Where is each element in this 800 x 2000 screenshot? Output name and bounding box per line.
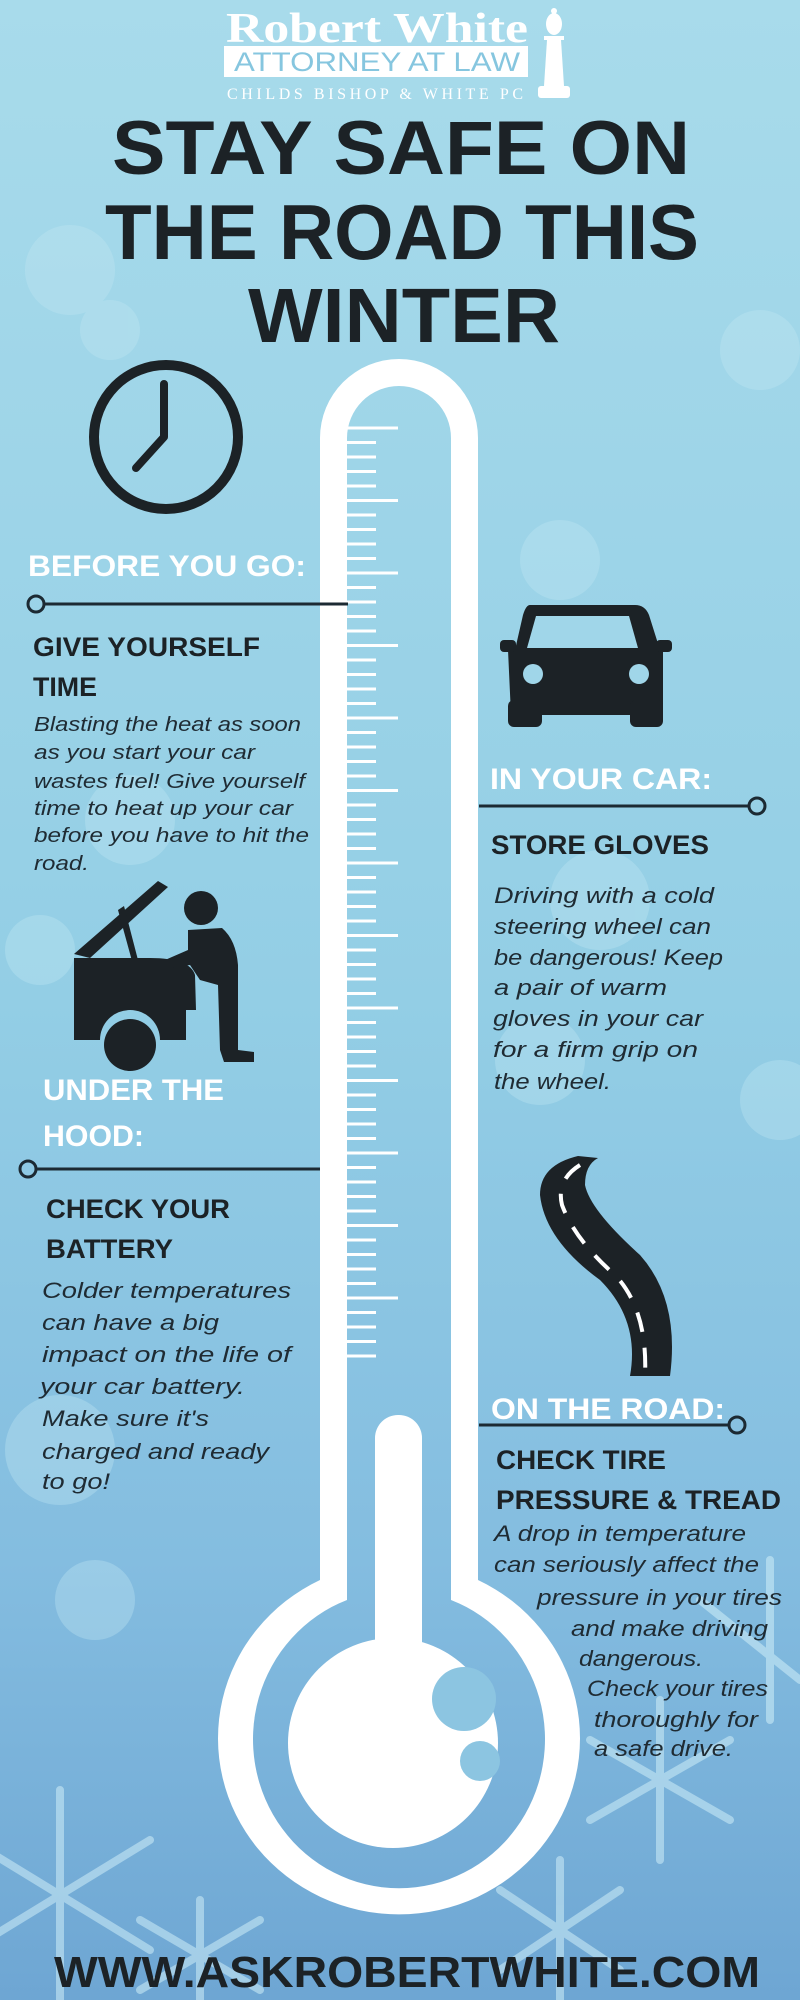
- subheading: store gloves: STORE GLOVES: [491, 830, 709, 860]
- text: check tire pressure: [492, 1521, 782, 1761]
- subheading: give yourself time: GIVE YOURSELF: [33, 632, 260, 662]
- heading: on the road: ON THE ROAD:: [491, 1393, 725, 1426]
- title: WINTER: [248, 273, 560, 359]
- text: check tire pressure: dangerous.: [579, 1646, 703, 1671]
- connector: in your car: [479, 798, 765, 814]
- title: [105, 106, 699, 359]
- text: check tire pressure: thoroughly for: [594, 1707, 760, 1732]
- heading: under the hood: HOOD:: [43, 1120, 144, 1153]
- text: check your battery: your car battery.: [37, 1374, 245, 1399]
- text: store gloves: [493, 883, 723, 1094]
- text: check your battery: to go!: [42, 1469, 110, 1494]
- connector: on the road: [479, 1417, 745, 1433]
- logo: CHILDS BISHOP & WHITE PC: [227, 86, 525, 103]
- heading: in your car: IN YOUR CAR:: [490, 763, 712, 796]
- text: give yourself time: as you start your car: [34, 742, 257, 764]
- subheading: give yourself time: TIME: [33, 672, 97, 702]
- text: check tire pressure: Check your tires: [587, 1676, 768, 1701]
- title: STAY SAFE ON: [112, 106, 690, 191]
- heading: under the hood: UNDER THE: [43, 1074, 224, 1107]
- text: check your battery: can have a big: [42, 1310, 220, 1335]
- text: store gloves: gloves in your car: [493, 1006, 705, 1031]
- text: check tire pressure: pressure in your tires: [536, 1585, 782, 1610]
- text: give yourself time: before you have to hit the: [34, 825, 309, 847]
- logo: Robert White: [226, 6, 528, 52]
- thermometer: [218, 359, 580, 1914]
- heading: before you go: BEFORE YOU GO:: [28, 550, 306, 583]
- text: store gloves: for a firm grip on: [493, 1037, 698, 1062]
- icon: mechanic under the hood: [74, 881, 254, 1071]
- text: give yourself time: [34, 714, 309, 875]
- subheading: check your battery: BATTERY: [46, 1234, 173, 1264]
- text: check your battery: Make sure it's: [42, 1406, 209, 1431]
- text: give yourself time: time to heat up your car: [34, 798, 295, 820]
- heading: under the hood: [43, 1074, 224, 1153]
- text: check tire pressure: can seriously affect the: [494, 1552, 759, 1577]
- text: check your battery: impact on the life of: [42, 1342, 295, 1367]
- subheading: check tire pressure: [496, 1445, 781, 1515]
- subheading: check tire pressure: PRESSURE & TREAD: [496, 1485, 781, 1515]
- text: store gloves: steering wheel can: [494, 914, 711, 939]
- icon: clock: [94, 365, 238, 509]
- footer url: WWW.ASKROBERTWHITE.COM: [54, 1948, 760, 1997]
- connector: under the hood: [20, 1161, 320, 1177]
- text: check tire pressure: a safe drive.: [594, 1736, 733, 1761]
- text: check tire pressure: and make driving: [571, 1616, 769, 1641]
- icon: car: [500, 605, 672, 727]
- text: give yourself time: Blasting the heat as soon: [34, 714, 301, 736]
- text: give yourself time: road.: [34, 853, 89, 875]
- icon: bishop chess piece: [538, 8, 570, 98]
- subheading: check your battery: CHECK YOUR: [46, 1194, 230, 1224]
- text: check your battery: charged and ready: [42, 1439, 271, 1464]
- title: THE ROAD THIS: [105, 188, 699, 276]
- icon: winding road: [540, 1156, 672, 1376]
- logo: [224, 6, 570, 103]
- text: give yourself time: wastes fuel! Give yourself: [34, 771, 308, 793]
- text: check your battery: [37, 1278, 295, 1494]
- text: store gloves: Driving with a cold: [494, 883, 715, 908]
- text: store gloves: a pair of warm: [494, 975, 667, 1000]
- connector: before you go: [28, 596, 348, 612]
- subheading: give yourself time: [33, 632, 260, 702]
- subheading: check your battery: [46, 1194, 230, 1264]
- text: check tire pressure: A drop in temperature: [492, 1521, 746, 1546]
- logo: ATTORNEY AT LAW: [234, 47, 521, 77]
- text: store gloves: be dangerous! Keep: [494, 945, 723, 970]
- subheading: check tire pressure: CHECK TIRE: [496, 1445, 666, 1475]
- text: store gloves: the wheel.: [494, 1069, 611, 1094]
- text: check your battery: Colder temperatures: [42, 1278, 291, 1303]
